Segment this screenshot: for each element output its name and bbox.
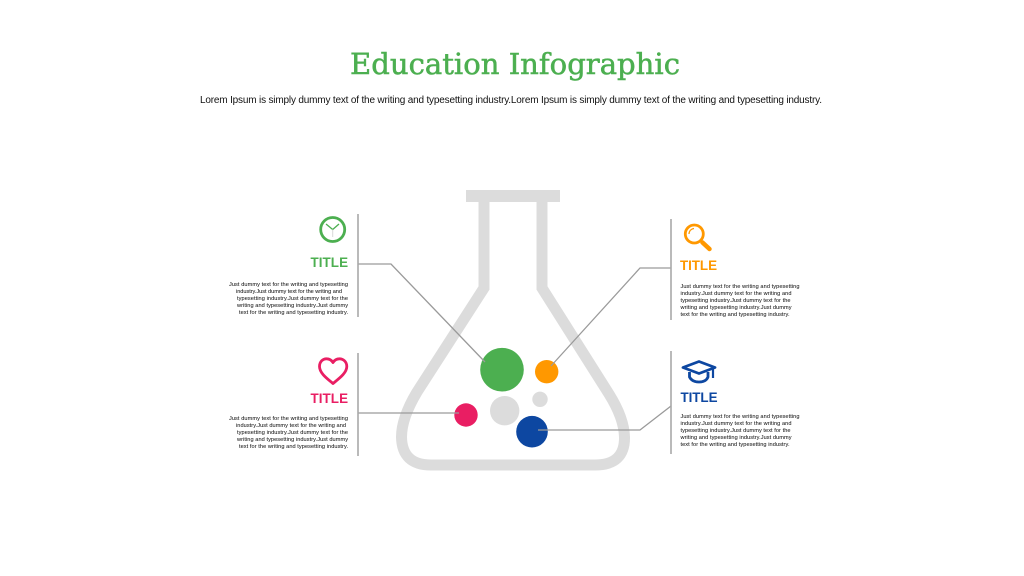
text block: industry.Just dummy text for the writing and bbox=[236, 289, 342, 295]
text block: typesetting industry.Just dummy text for the bbox=[680, 428, 790, 434]
heading: TITLE bbox=[310, 255, 348, 270]
text block: writing and typesetting industry.Just dummy bbox=[680, 435, 792, 441]
heading: TITLE bbox=[310, 391, 348, 406]
panel: bottom left bbox=[229, 353, 358, 456]
icon: graduation cap bbox=[683, 362, 715, 382]
connector: cap to blue bubble bbox=[538, 406, 671, 430]
text block: industry.Just dummy text for the writing and bbox=[680, 291, 792, 297]
text block: Just dummy text for the writing and typesetting bbox=[229, 416, 348, 422]
connector: magnifier to orange bubble bbox=[551, 268, 671, 366]
connector: heart to pink bubble bbox=[358, 412, 459, 414]
gray bubbles bbox=[490, 392, 548, 425]
pink bubble bbox=[454, 403, 478, 427]
icon: clock bbox=[321, 218, 345, 242]
text block: text for the writing and typesetting industry. bbox=[680, 312, 790, 318]
text block: writing and typesetting industry.Just dummy bbox=[236, 303, 348, 309]
text block: writing and typesetting industry.Just dummy bbox=[680, 305, 792, 311]
text block: text for the writing and typesetting industry. bbox=[680, 442, 790, 448]
text block: typesetting industry.Just dummy text for the bbox=[680, 298, 790, 304]
flask illustration bbox=[402, 190, 625, 465]
text block: writing and typesetting industry.Just dummy bbox=[236, 437, 348, 443]
text block bbox=[229, 416, 348, 450]
text block bbox=[229, 282, 348, 316]
blue bubble bbox=[516, 416, 548, 448]
text block: typesetting industry.Just dummy text for the bbox=[237, 296, 348, 302]
text block: industry.Just dummy text for the writing and bbox=[236, 423, 346, 429]
text block bbox=[680, 284, 800, 318]
text block: industry.Just dummy text for the writing and bbox=[680, 421, 792, 427]
text block: text for the writing and typesetting industry. bbox=[239, 310, 348, 316]
panel: top right bbox=[671, 219, 800, 320]
heading: TITLE bbox=[680, 258, 717, 273]
text block: Just dummy text for the writing and typesetting bbox=[680, 284, 800, 290]
icon: heart bbox=[320, 359, 347, 384]
heading: TITLE bbox=[680, 390, 718, 405]
subtitle: Lorem Ipsum is simply dummy text of the writing and typesetting industry.Lorem Ipsum is simply dummy text of the writing and typesetting industry. bbox=[200, 95, 822, 106]
text block bbox=[680, 414, 800, 448]
icon: magnifier bbox=[685, 225, 710, 249]
text block: text for the writing and typesetting industry. bbox=[239, 444, 348, 450]
connector: clock to green bubble bbox=[358, 264, 485, 362]
text block: Just dummy text for the writing and typesetting bbox=[680, 414, 800, 420]
panel: top left bbox=[229, 214, 358, 317]
text block: Just dummy text for the writing and typesetting bbox=[229, 282, 348, 288]
panel: bottom right bbox=[671, 351, 800, 454]
orange bubble bbox=[535, 360, 558, 383]
text block: typesetting industry.Just dummy text for the bbox=[237, 430, 348, 436]
green bubble bbox=[480, 348, 524, 392]
title: Education Infographic bbox=[350, 47, 680, 81]
